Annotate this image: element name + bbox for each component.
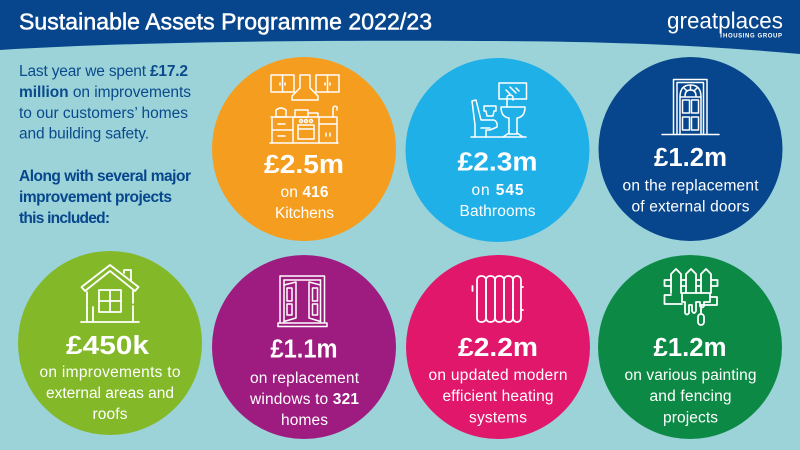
icon: door [662,80,719,134]
icon: bathroom [471,83,526,137]
subheading text block: this included: [19,210,110,227]
panel: kitchens [212,57,396,241]
description: on updated modern [428,367,568,384]
icon: fence and paint roller [664,269,718,325]
description: Bathrooms [460,203,536,220]
description: on 416 [280,184,329,201]
description [40,364,180,423]
subheading text block [19,168,191,227]
description: projects [663,410,718,426]
description [460,182,536,220]
value: £1.2m [654,144,727,172]
description [249,370,360,429]
value: £1.2m [654,334,726,362]
description: on the replacement [622,178,759,194]
logo: greatplaces housing group: HOUSING GROUP [723,34,782,40]
description: and fencing [650,388,732,405]
description: efficient heating [442,388,554,405]
value: £2.3m [458,148,538,176]
description: homes [281,412,328,429]
intro text block: to our customers’ homes [19,105,188,122]
value: £2.5m [264,151,344,179]
header banner [0,0,800,54]
description [428,367,568,426]
title: Sustainable Assets Programme 2022/23 [19,8,432,34]
panel: painting and fencing [598,255,782,439]
description: on various painting [624,367,756,384]
intro text block: million on improvements [19,84,191,101]
value: £450k [66,332,150,360]
description [622,178,759,216]
panel: heating systems [406,255,590,439]
description [624,367,756,426]
description: of external doors [632,198,750,216]
intro text block: Last year we spent £17.2 [19,63,188,80]
intro text block [19,63,191,142]
description: windows to 321 [249,391,359,408]
panel: external doors [598,57,782,241]
description: Kitchens [275,205,334,222]
icon: house [81,265,139,322]
intro text block: and building safety. [19,126,149,142]
panel: replacement windows [212,255,396,439]
description: on replacement [250,370,360,387]
icon: kitchen [270,75,339,143]
description: on 545 [472,182,524,199]
description [275,184,334,222]
panel: external areas and roofs [18,251,202,435]
icon: radiator [472,276,523,322]
subheading text block: Along with several major [19,168,191,185]
description: roofs [92,406,128,423]
description: on improvements to [40,364,180,381]
logo: greatplaces housing group: greatplaces [667,8,783,34]
subheading text block: improvement projects [19,189,172,206]
description: systems [469,410,527,426]
value: £2.2m [458,334,538,362]
panel: bathrooms [406,58,590,242]
value: £1.1m [270,336,338,364]
description: external areas and [46,385,174,402]
icon: open window [278,276,327,326]
